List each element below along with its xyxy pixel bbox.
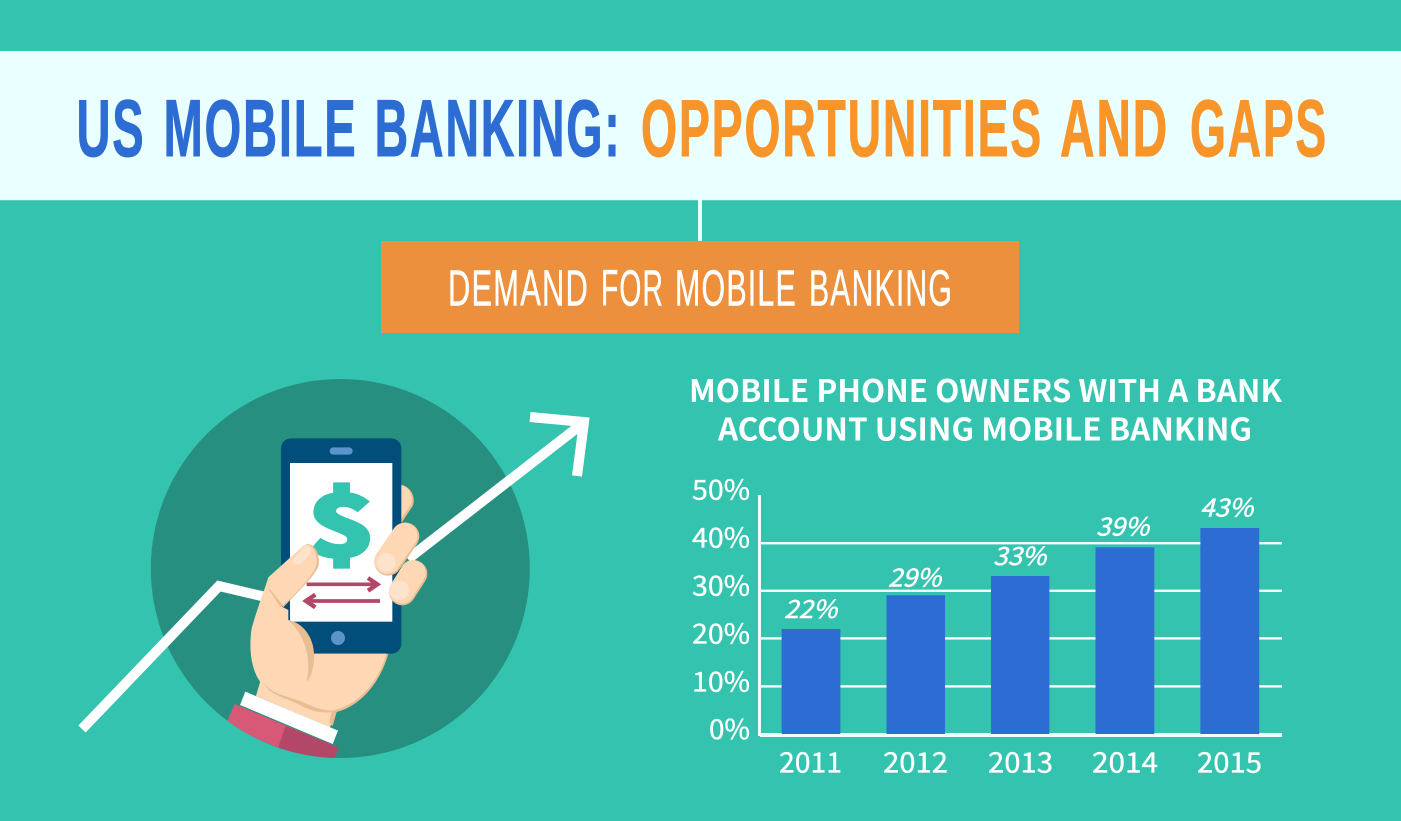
- dollar sign: $: [307, 458, 376, 581]
- bar chart: [692, 468, 1282, 782]
- palm and thumb: [250, 545, 387, 713]
- y axis labels: 10%: [692, 660, 750, 700]
- y axis labels: [692, 468, 750, 747]
- phone button: [331, 631, 345, 645]
- hand and phone artwork: [250, 438, 414, 727]
- chart heading: ACCOUNT USING MOBILE BANKING: [717, 404, 1252, 450]
- title: orange part: AND: [1060, 84, 1169, 174]
- front fingers: [387, 536, 414, 592]
- x axis labels: 2014: [1092, 742, 1158, 782]
- title band: [0, 51, 1401, 201]
- chart heading: [689, 366, 1283, 450]
- y axis labels: 50%: [692, 468, 750, 508]
- title: orange part: OPPORTUNITIES: [641, 84, 1043, 174]
- grid lines and axes: [758, 495, 1282, 737]
- bars: [782, 528, 1259, 734]
- title: blue part: US: [76, 84, 146, 174]
- title: blue part: BANKING:: [374, 84, 622, 174]
- y axis labels: 30%: [692, 564, 750, 604]
- title: blue part: MOBILE: [164, 84, 358, 174]
- x axis labels: 2012: [883, 742, 948, 782]
- phone body: [281, 438, 401, 654]
- white cuff: [240, 692, 338, 744]
- x axis labels: 2011: [779, 742, 842, 782]
- title: blue part: [76, 84, 622, 174]
- dark teal circle: [151, 379, 530, 758]
- sleeve: [227, 704, 338, 758]
- section heading text: DEMAND: [448, 260, 589, 316]
- y axis labels: 40%: [692, 516, 750, 556]
- y axis labels: 0%: [709, 708, 750, 747]
- phone screen: [290, 463, 392, 622]
- section heading text: BANKING: [809, 260, 953, 316]
- y axis labels: 20%: [692, 612, 750, 652]
- fingernails: [377, 553, 409, 600]
- thumb nail: [293, 546, 310, 565]
- bar value labels: 22%: [784, 590, 839, 626]
- hand shadow edge: [329, 654, 388, 726]
- shirt cuff and sleeve: [240, 692, 338, 744]
- section heading text: FOR: [601, 260, 664, 316]
- chart heading: MOBILE PHONE OWNERS WITH A BANK: [689, 366, 1283, 411]
- bar value labels: 33%: [993, 537, 1048, 573]
- transfer arrows: [306, 578, 380, 607]
- illustration: hand holding phone with rising arrow: [82, 379, 584, 769]
- section heading text: [448, 260, 953, 316]
- bar value labels: 39%: [1096, 508, 1151, 544]
- connector from title to section banner: [698, 200, 702, 241]
- bar value labels: 43%: [1200, 488, 1255, 524]
- section banner: [381, 241, 1019, 333]
- section heading text: MOBILE: [675, 260, 797, 316]
- bar value labels: [784, 488, 1255, 626]
- wrist: [256, 680, 337, 727]
- x axis labels: [779, 742, 1262, 782]
- palm creases: [264, 588, 337, 712]
- back finger: [397, 485, 414, 523]
- x axis labels: 2015: [1197, 742, 1262, 782]
- bar value labels: 29%: [888, 558, 943, 594]
- rising trend arrow: [82, 417, 584, 729]
- phone speaker: [330, 447, 353, 455]
- x axis labels: 2013: [988, 742, 1053, 782]
